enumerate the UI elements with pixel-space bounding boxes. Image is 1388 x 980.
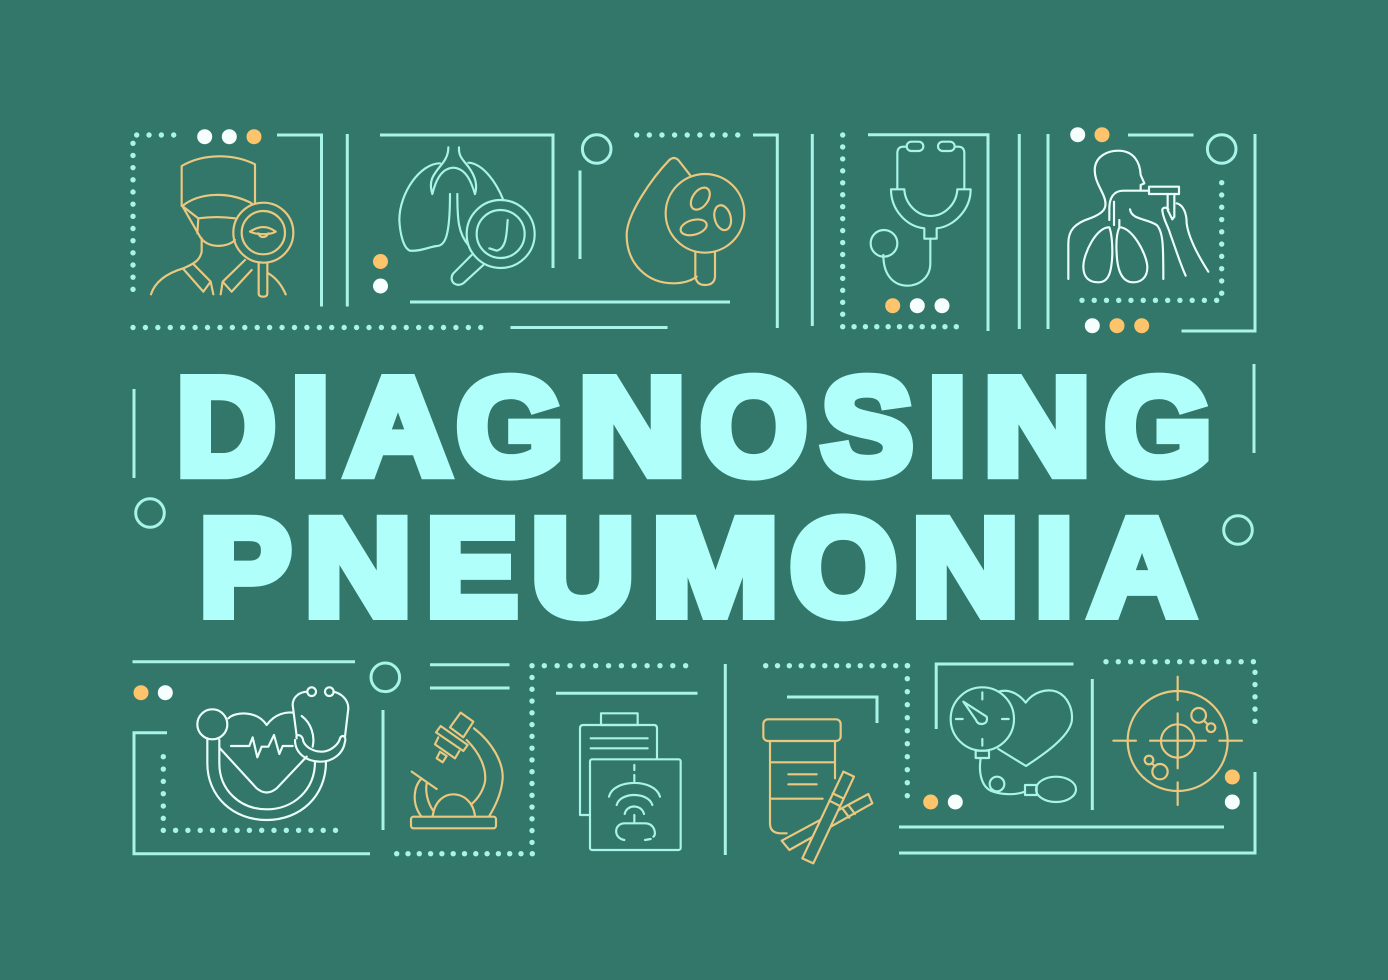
title: N — [984, 351, 1091, 504]
title: A — [1090, 490, 1194, 644]
title: D — [177, 351, 276, 504]
title: N — [912, 492, 1019, 644]
icon: blood drop with magnifier — [627, 158, 744, 285]
icon: sample jar and sticks — [763, 719, 872, 863]
title: G — [1105, 351, 1212, 504]
title: O — [790, 492, 897, 644]
icon: bacteria target — [1113, 677, 1242, 805]
icon: clipboard and x-ray — [580, 713, 681, 850]
icon: blood pressure gauge and heart — [951, 687, 1076, 802]
title: U — [531, 490, 634, 644]
title — [177, 350, 1212, 644]
title: S — [822, 351, 913, 504]
icon: stethoscope — [871, 142, 971, 286]
icon: lungs with magnifier — [399, 147, 535, 285]
title: P — [200, 492, 291, 644]
title: I — [1035, 492, 1073, 644]
rings — [136, 135, 1252, 692]
icon: lung function test — [1068, 151, 1208, 282]
title: N — [579, 351, 686, 504]
title: M — [652, 490, 779, 644]
icon: microscope — [411, 713, 503, 828]
title: I — [928, 351, 966, 504]
title: E — [426, 492, 518, 644]
title: I — [291, 351, 329, 504]
icon: heart with stethoscope — [197, 687, 348, 820]
title: A — [346, 350, 450, 503]
icon: doctor with magnifier — [151, 156, 293, 297]
accent dots — [134, 127, 1240, 809]
title: G — [457, 351, 563, 504]
title: N — [305, 492, 412, 644]
title: O — [700, 351, 807, 504]
